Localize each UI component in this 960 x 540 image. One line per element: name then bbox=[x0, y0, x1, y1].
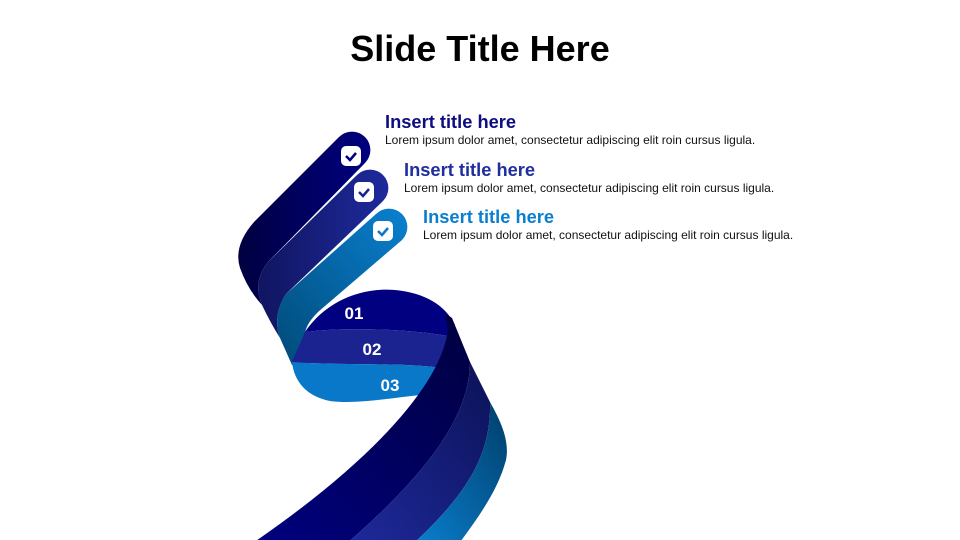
icon: check 2 bbox=[354, 182, 374, 202]
band 03 bbox=[292, 362, 447, 402]
text block 1: Lorem ipsum dolor amet, consectetur adipiscing elit roin cursus ligula. bbox=[385, 133, 755, 147]
upper strip 3 bbox=[277, 209, 407, 365]
upper strip 1 bbox=[238, 132, 370, 305]
band 02: 02 bbox=[363, 340, 381, 359]
lower strip 2 bbox=[345, 362, 490, 540]
text block 3: Lorem ipsum dolor amet, consectetur adipiscing elit roin cursus ligula. bbox=[423, 228, 793, 242]
icon: check 3 bbox=[373, 221, 393, 241]
text block 2: Lorem ipsum dolor amet, consectetur adipiscing elit roin cursus ligula. bbox=[404, 181, 774, 195]
band 03: 03 bbox=[381, 376, 399, 395]
icon: check 1 bbox=[341, 146, 361, 166]
text block 2 bbox=[404, 159, 774, 195]
text block 1: Insert title here bbox=[385, 111, 516, 132]
band 02 bbox=[292, 329, 452, 369]
band 01 bbox=[305, 290, 455, 337]
lower strip 3 bbox=[412, 402, 507, 540]
text block 3 bbox=[423, 206, 793, 242]
text block 3: Insert title here bbox=[423, 206, 554, 227]
title: Slide Title Here bbox=[350, 28, 610, 69]
upper strip 2 bbox=[258, 170, 388, 338]
text block 1 bbox=[385, 111, 755, 147]
text block 2: Insert title here bbox=[404, 159, 535, 180]
band 01: 01 bbox=[345, 304, 363, 323]
lower strip 1 bbox=[250, 313, 470, 540]
